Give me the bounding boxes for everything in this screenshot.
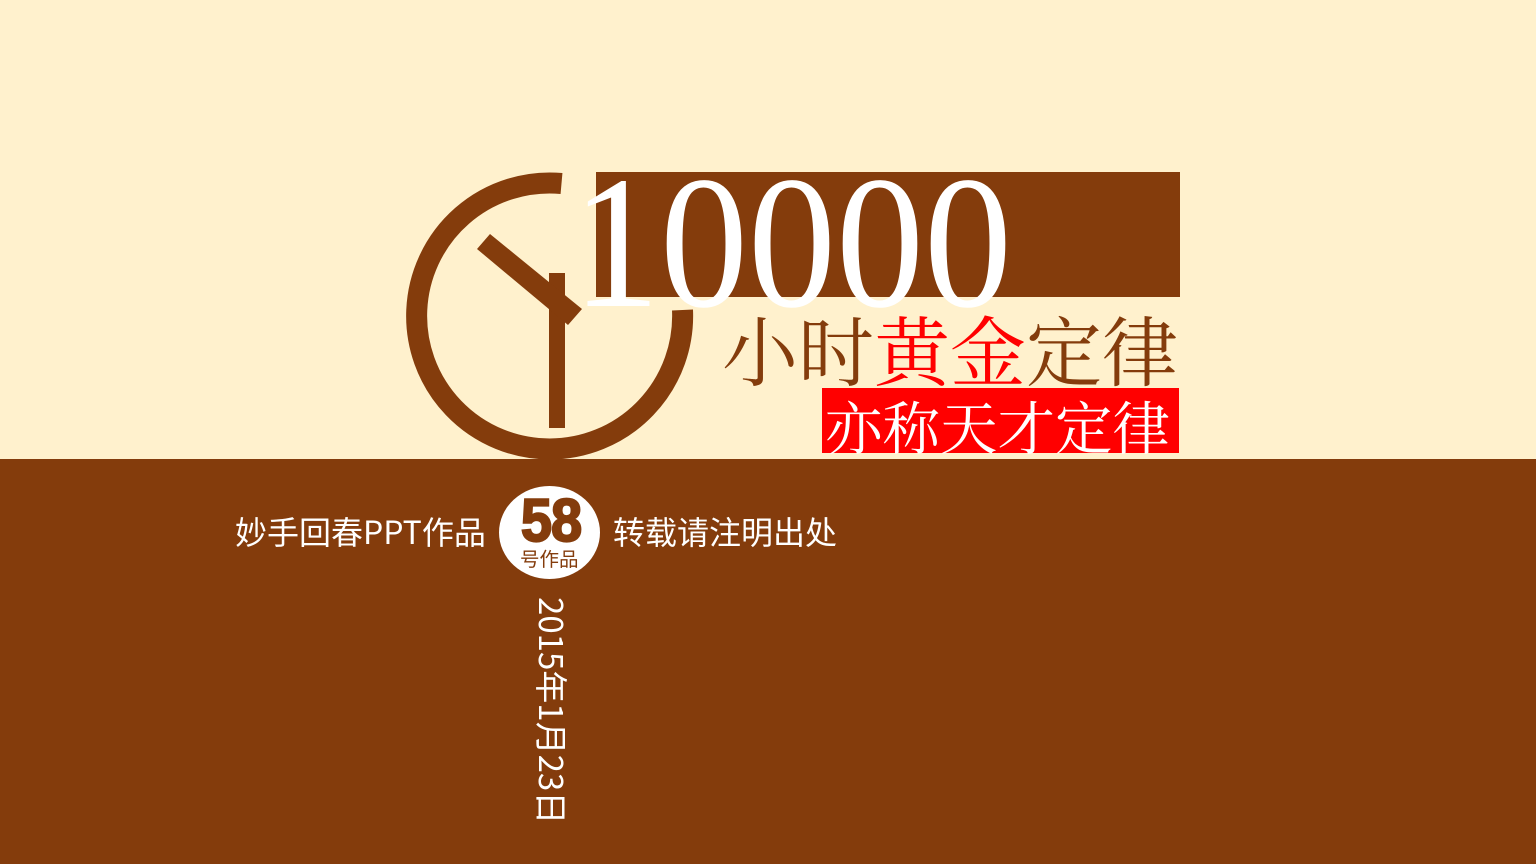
big number 10000: 10000 <box>572 138 1012 347</box>
right credit text: 转载请注明出处 <box>613 508 837 554</box>
subtitle: 亦称天才定律 <box>825 384 1170 466</box>
badge caption: 号作品 <box>520 543 579 572</box>
vertical date: 2015年1月23日 <box>529 597 577 824</box>
red subtitle box <box>822 388 1179 453</box>
left credit text: 妙手回春PPT作品 <box>235 508 486 554</box>
heading: golden rule: 小时黄金定律 <box>722 293 1178 402</box>
number banner <box>596 172 1180 297</box>
bottom brown panel <box>0 459 1536 864</box>
badge: work number <box>499 486 600 579</box>
badge number: 58 <box>521 486 581 554</box>
